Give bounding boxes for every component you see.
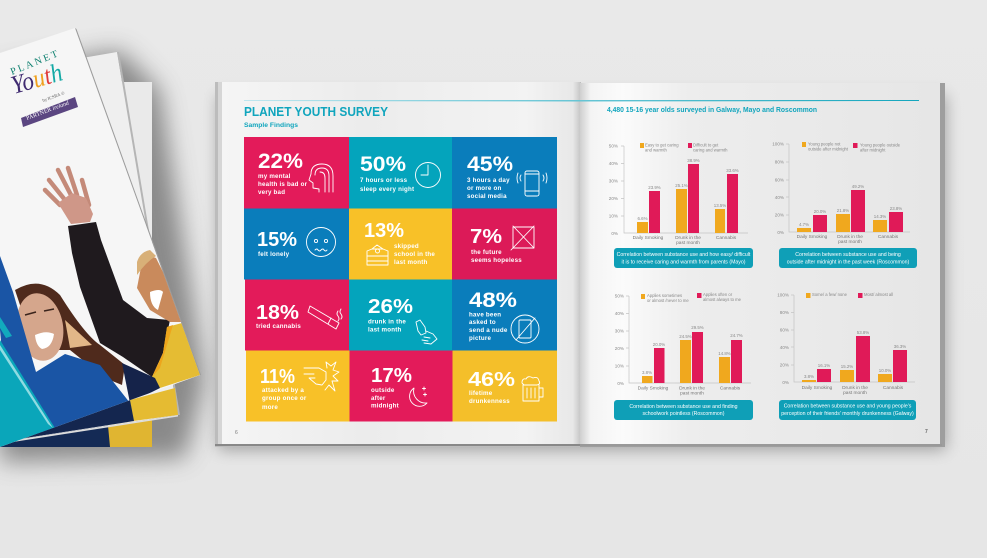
bars: 20.0%	[814, 209, 826, 214]
chart: friends drunkenness: 60%	[780, 328, 789, 332]
icon: crossed phone	[511, 315, 539, 343]
cell: skipped school: school in the	[394, 251, 435, 258]
cell: lonely: felt lonely	[258, 251, 290, 258]
chart: schoolwork pointless: 40%	[615, 311, 624, 316]
cell: mental health: very bad	[258, 189, 285, 196]
bars	[642, 325, 743, 383]
caption	[614, 400, 753, 420]
chart: schoolwork pointless: Daily Smoking	[638, 386, 669, 392]
chart: outside after midnight: 0%	[777, 230, 784, 235]
cell: sleep	[349, 137, 452, 208]
legend	[641, 292, 742, 303]
chart: friends drunkenness: 20%	[780, 362, 789, 368]
cell: skipped school: skipped	[394, 243, 419, 250]
bars: 33.6%	[726, 168, 739, 173]
title: PLANET YOUTH SURVEY	[244, 104, 388, 119]
legend: Applies often or	[703, 292, 733, 297]
chart: schoolwork pointless: 20%	[615, 346, 624, 351]
legend: and warmth	[645, 148, 668, 152]
chart: schoolwork pointless: 50%	[615, 294, 624, 298]
chart: schoolwork pointless: 0%	[617, 381, 624, 386]
logo: Youth	[8, 58, 66, 100]
chart: schoolwork pointless: Drunk in the	[679, 386, 705, 392]
raised hand	[45, 168, 93, 224]
icon: punch	[304, 362, 339, 391]
page number 7: 7	[925, 429, 928, 435]
icon: phone	[517, 171, 547, 196]
chart: schoolwork pointless: Cannabis	[720, 386, 741, 392]
chart: outside after midnight: Daily Smoking	[797, 234, 828, 240]
cell: attacked: attacked by a	[262, 387, 304, 394]
caption: perception of their friends' monthly drunkenness (Galway)	[781, 411, 914, 417]
caption: schoolwork pointless (Roscommon)	[643, 411, 725, 417]
chart: caring and warmth: 10%	[609, 214, 618, 218]
cell: nude picture: send a nude	[469, 327, 508, 334]
right page heading: 4,480 15-16 year olds surveyed in Galway, Mayo and Roscommon	[607, 105, 817, 114]
chart: caring and warmth: 20%	[609, 196, 618, 201]
cell: nude picture	[452, 280, 557, 350]
chart: schoolwork pointless	[614, 292, 753, 420]
legend: Applies sometimes	[647, 293, 682, 298]
chart: caring and warmth: 40%	[609, 161, 618, 166]
legend: Some/ a few/ none	[812, 292, 848, 297]
cell: nude picture: 48%	[469, 289, 517, 312]
bars	[797, 184, 903, 232]
bars: 24.7%	[730, 333, 743, 338]
cell: after midnight	[350, 350, 452, 422]
icon: bottle in hand	[416, 320, 437, 344]
brochure stack	[0, 28, 205, 462]
bars: 23.9%	[648, 185, 661, 190]
back brochure	[0, 82, 152, 447]
bars	[802, 330, 907, 382]
chart: friends drunkenness: 0%	[782, 380, 789, 385]
bars: 21.8%	[837, 208, 849, 213]
page number 6: 6	[235, 430, 238, 436]
chart: friends drunkenness: 100%	[777, 292, 789, 298]
caption: outside after midnight in the past week (Roscommon)	[787, 260, 910, 266]
cell: lonely	[244, 208, 349, 280]
legend: after midnight	[860, 148, 886, 152]
cell: nude picture: asked to	[469, 319, 496, 326]
middle brochure	[0, 52, 178, 442]
cell: attacked: more	[262, 404, 278, 411]
chart: friends drunkenness: 40%	[780, 345, 789, 350]
cell: nude picture: have been	[469, 312, 501, 318]
cell: mental health: my mental	[258, 173, 291, 180]
caption	[779, 400, 916, 420]
logo: PARTNER ireland	[26, 100, 71, 122]
stat grid	[244, 137, 557, 422]
chart: caring and warmth: Cannabis	[716, 235, 737, 241]
cell: sleep: 50%	[360, 153, 406, 176]
cell: social media: social media	[467, 193, 507, 200]
bars: 6.6%	[637, 216, 648, 221]
front cover	[0, 28, 201, 447]
teal corner	[0, 340, 55, 447]
icon: sad face	[306, 228, 336, 256]
cell: hopeless: 7%	[470, 226, 502, 248]
cell: attacked: group once or	[262, 395, 307, 402]
cell: mental health: 22%	[258, 150, 303, 173]
bars: 10.0%	[879, 368, 891, 373]
bars: 15.2%	[841, 364, 853, 369]
caption: Correlation between substance use and how easy/ difficult	[617, 252, 751, 258]
icon: moon	[410, 387, 427, 406]
cell: lonely: 15%	[257, 229, 297, 251]
chart: outside after midnight: past month	[838, 239, 862, 245]
dark sleeve	[68, 222, 170, 377]
cell: after midnight: after	[371, 395, 386, 402]
caption	[779, 248, 917, 268]
chart: schoolwork pointless: past month	[680, 390, 704, 396]
caption: it is to receive caring and warmth from parents (Mayo)	[622, 260, 746, 266]
chart: friends drunkenness: Drunk in the	[842, 385, 868, 391]
mockup scene	[0, 28, 956, 479]
caption: Correlation between substance use and finding	[629, 404, 738, 410]
cell: cannabis	[245, 280, 349, 350]
chart: caring and warmth: 0%	[611, 231, 618, 236]
chart: friends drunkenness	[777, 292, 916, 420]
left girl face	[18, 293, 64, 361]
cell: cannabis: 18%	[256, 302, 299, 324]
chart: friends drunkenness: past month	[843, 390, 867, 396]
cell: social media: or more on	[467, 185, 502, 192]
cell: social media	[452, 137, 557, 208]
bars: 36.3%	[894, 344, 906, 349]
icon: head	[309, 164, 333, 192]
icon: clock	[416, 162, 440, 188]
cell: drunkenness: lifetime	[469, 390, 493, 397]
bars: 23.8%	[890, 206, 902, 211]
legend: outside after midnight	[808, 146, 849, 152]
left girl hair	[15, 284, 125, 385]
cell: nude picture: picture	[469, 335, 492, 342]
legend: or almost /never to me	[647, 298, 689, 303]
cell: hopeless	[452, 208, 557, 280]
chart: outside after midnight: 60%	[775, 178, 784, 182]
chart: friends drunkenness: Daily Smoking	[802, 385, 833, 391]
cell: skipped school: 13%	[364, 220, 404, 242]
chart: caring and warmth: 50%	[609, 144, 618, 148]
chart: outside after midnight: Cannabis	[878, 234, 899, 240]
cell: social media: 45%	[467, 153, 513, 176]
left page	[222, 82, 580, 444]
chart: schoolwork pointless: 10%	[615, 364, 624, 368]
right girl	[137, 250, 200, 388]
cell: drunk: last month	[368, 326, 401, 334]
legend: Young people outside	[860, 142, 901, 148]
chart: caring and warmth	[609, 142, 753, 268]
chart: caring and warmth: 30%	[609, 178, 618, 184]
right page	[580, 83, 940, 444]
cell: hopeless: the future	[471, 249, 502, 256]
icon: crossed box	[511, 226, 534, 250]
cell: drunk	[349, 280, 452, 350]
cell: after midnight: outside	[371, 387, 395, 394]
bars: 24.5%	[679, 334, 692, 339]
legend	[802, 142, 901, 152]
cell: skipped school	[349, 208, 452, 280]
legend: Difficult to get	[693, 142, 719, 148]
chart: schoolwork pointless: 30%	[615, 328, 624, 334]
legend: Easy to get caring	[645, 142, 679, 148]
cell: mental health	[244, 137, 349, 208]
bars: 29.5%	[691, 325, 704, 330]
bars: 25.1%	[675, 183, 688, 188]
cover photo	[0, 168, 200, 447]
bars: 53.8%	[857, 330, 869, 335]
chart: outside after midnight: 80%	[775, 160, 784, 164]
legend: Most/ almost all	[864, 292, 893, 297]
chart: caring and warmth: Daily Smoking	[633, 235, 664, 241]
cell: attacked	[246, 350, 350, 422]
cell: hopeless: seems hopeless	[471, 257, 522, 264]
legend: almost always to me	[703, 297, 742, 302]
legend: Young people not	[808, 142, 841, 146]
subtitle: Sample Findings	[244, 122, 298, 129]
chart: outside after midnight: Drunk in the	[837, 234, 863, 240]
chart: friends drunkenness: 80%	[780, 310, 789, 315]
cell: cannabis: tried cannabis	[256, 323, 301, 330]
bars: 3.8%	[804, 374, 814, 379]
cell: drunk: 26%	[368, 295, 413, 318]
open book	[215, 82, 946, 450]
cell: drunkenness: drunkenness	[469, 398, 510, 405]
icon: beer mug	[522, 377, 543, 401]
bars: 20.0%	[653, 342, 665, 347]
bars: 13.5%	[714, 203, 726, 208]
cell: sleep: sleep every night	[360, 186, 414, 193]
cell: drunk: drunk in the	[368, 318, 406, 326]
legend	[640, 142, 728, 152]
cell: mental health: health is bad or	[258, 181, 308, 188]
legend	[806, 292, 893, 298]
cell: after midnight: 17%	[371, 365, 412, 387]
cell: skipped school: last month	[394, 259, 427, 266]
blue hoodie	[0, 256, 130, 440]
cell: attacked: 11%	[260, 366, 295, 388]
icon: cigarette	[308, 306, 342, 329]
bars: 38.9%	[687, 158, 700, 163]
caption	[614, 248, 753, 268]
chart: friends drunkenness: Cannabis	[883, 385, 904, 391]
bars: 14.3%	[874, 214, 886, 219]
chart: outside after midnight	[772, 142, 917, 268]
caption: Correlation between substance use and young people's	[784, 404, 912, 410]
bars: 14.8%	[718, 351, 731, 356]
caption: Correlation between substance use and being	[795, 252, 901, 258]
chart: caring and warmth: Drunk in the	[675, 235, 701, 241]
chart: caring and warmth: past month	[676, 240, 700, 246]
bars: 16.1%	[818, 363, 830, 368]
legend: caring and warmth	[693, 148, 728, 152]
bars	[637, 158, 739, 233]
cell: social media: 3 hours a day	[467, 177, 510, 184]
icon: school	[367, 245, 388, 265]
cell: sleep: 7 hours or less	[360, 177, 408, 184]
bars: 3.8%	[642, 370, 652, 375]
bars: 49.2%	[852, 184, 864, 189]
header rule	[244, 100, 919, 102]
logo: by ICSRA ©	[42, 90, 66, 103]
logo	[8, 49, 78, 127]
cell: after midnight: midnight	[371, 402, 399, 410]
cell: drunkenness	[452, 350, 557, 422]
chart: outside after midnight: 40%	[775, 195, 784, 200]
chart: outside after midnight: 20%	[775, 212, 784, 218]
bars: 4.7%	[799, 222, 809, 227]
logo: PLANET	[9, 49, 59, 78]
chart: outside after midnight: 100%	[772, 142, 784, 146]
cell: drunkenness: 46%	[468, 368, 515, 391]
